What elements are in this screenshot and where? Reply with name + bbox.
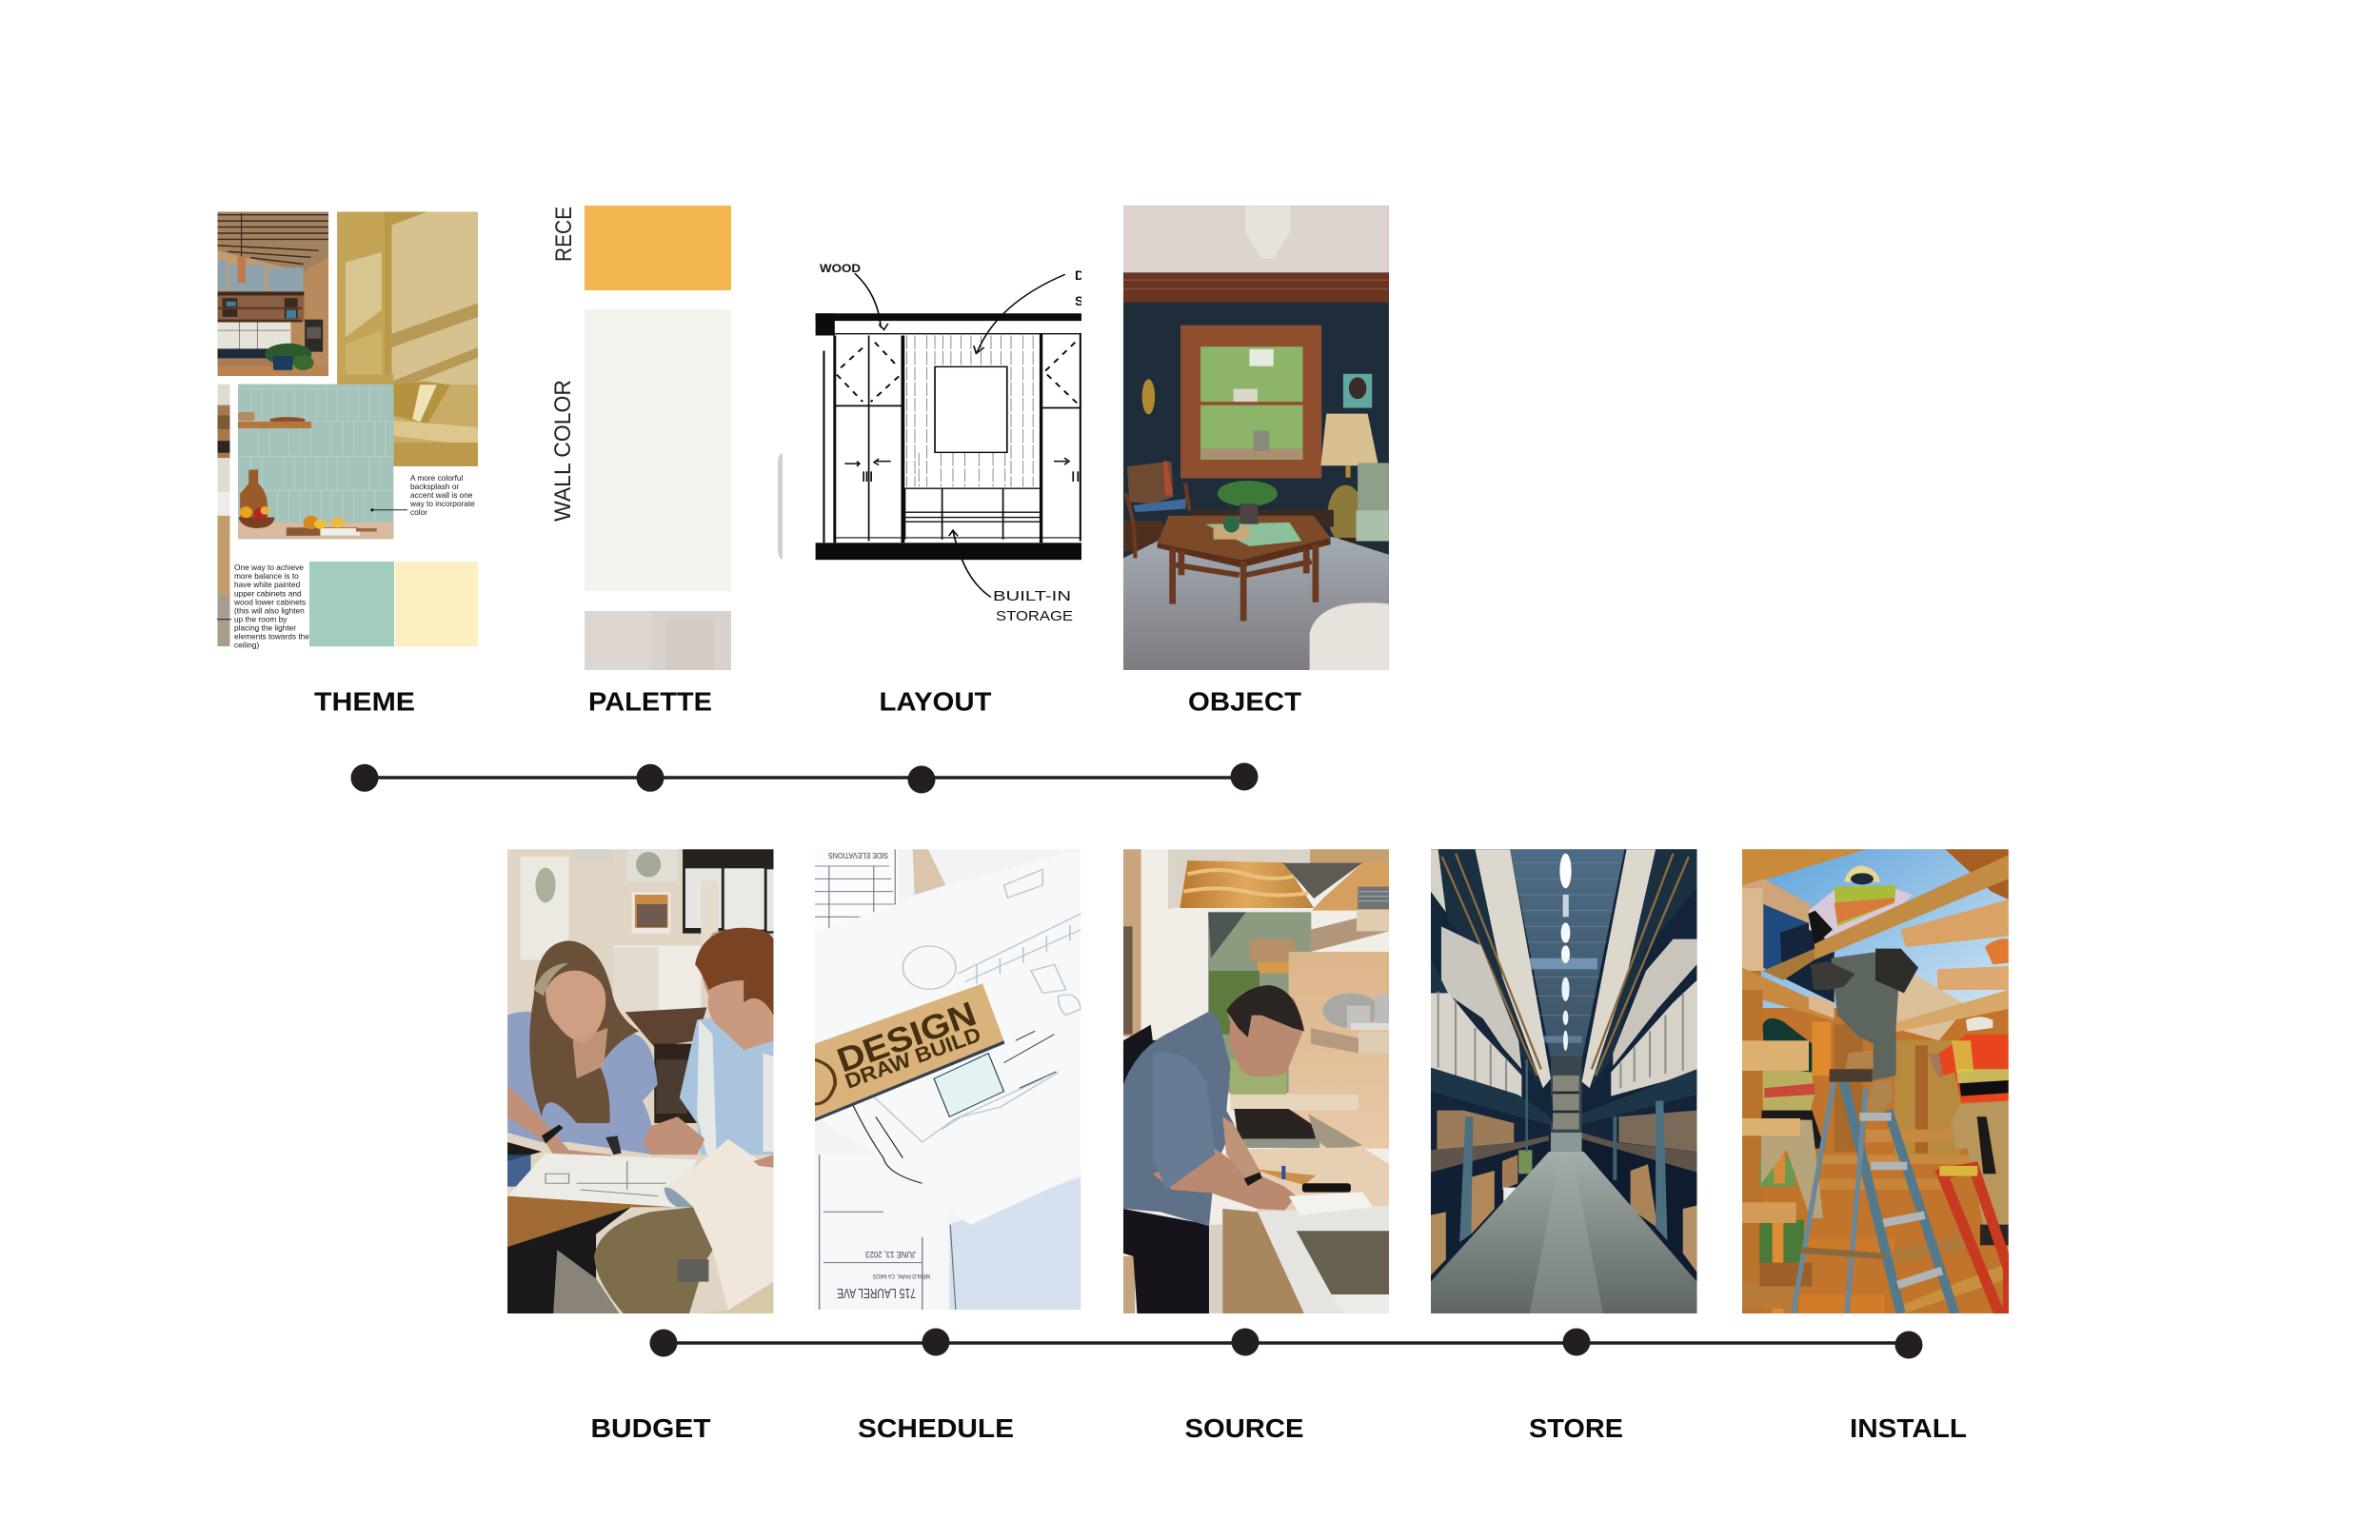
handwritten note: built-in storage <box>994 591 1072 621</box>
panel: layout sketch <box>816 262 1084 624</box>
callout: balance note: upper cabinets and <box>234 588 302 598</box>
label: object: OBJECT <box>1188 687 1301 716</box>
label: schedule: SCHEDULE <box>858 1413 1014 1443</box>
callout: balance note: up the room by <box>234 615 288 624</box>
label: layout: LAYOUT <box>880 687 992 716</box>
handwritten note: built-in storage: BUILT-IN <box>993 588 1071 604</box>
marker: install <box>1894 1331 1923 1359</box>
callout: balance note: One way to achieve <box>234 563 304 572</box>
right racks <box>1582 849 1696 1123</box>
blueprint text: MENLO PARK, CA 94025 <box>873 1273 930 1279</box>
callout: colorful backsplash note: accent wall is one <box>410 490 473 500</box>
marker: layout <box>908 765 935 794</box>
infographic canvas <box>217 206 2009 1437</box>
swatch: stone texture <box>585 611 731 670</box>
label: wall color: WALL COLOR <box>550 380 576 522</box>
photo: budget, two people reviewing plans <box>507 849 774 1313</box>
callout: balance note <box>233 563 309 650</box>
panel: object photo, living room <box>1123 206 1389 670</box>
marker: store <box>1563 1329 1590 1355</box>
scroll handle <box>778 453 783 560</box>
left worker <box>1763 1018 1812 1076</box>
label: palette: PALETTE <box>588 687 712 716</box>
callout: colorful backsplash note: way to incorporate <box>409 499 475 508</box>
photo: store, warehouse aisle <box>1431 849 1696 1313</box>
floor <box>1431 1152 1696 1313</box>
photo: sunlit yellow wall <box>337 211 478 466</box>
sign text: design draw build: DRAW BUILD <box>842 1022 984 1094</box>
red ladder <box>1942 1168 2009 1313</box>
right workers <box>1985 938 2009 964</box>
blueprint text <box>828 851 930 1301</box>
left racks <box>1431 849 1553 1123</box>
marker: object <box>1230 763 1259 790</box>
marker: palette <box>636 764 664 792</box>
photo: kitchen with slatted ceiling <box>217 211 328 376</box>
callout: colorful backsplash note: A more colorful <box>410 473 463 483</box>
callout: balance note: more balance is to <box>234 571 299 581</box>
timeline: top row <box>350 763 1259 794</box>
label: rece: RECE <box>551 207 577 262</box>
handwritten note: built-in storage: STORAGE <box>996 608 1073 624</box>
marker: source <box>1232 1329 1259 1355</box>
label: store: STORE <box>1529 1413 1623 1443</box>
marker: theme <box>350 764 379 792</box>
callout: balance note: (this will also lighten <box>234 605 305 615</box>
callout leader: backsplash <box>370 508 407 511</box>
label: install: INSTALL <box>1850 1413 1967 1443</box>
callout: balance note: wood lower cabinets <box>233 597 306 606</box>
callout: balance note: have white painted <box>234 580 301 589</box>
swatch: off-white <box>585 309 731 591</box>
callout: balance note: placing the lighter <box>234 623 296 633</box>
marker: schedule <box>922 1329 950 1355</box>
blueprint text: JUNE 13, 2023 <box>865 1249 916 1259</box>
sign text: design draw build: DESIGN <box>832 994 982 1080</box>
swatch: pale yellow <box>395 562 478 646</box>
photo: schedule, plans with design draw build sign <box>815 849 1081 1310</box>
panel: palette <box>550 206 731 670</box>
blueprint text: SIDE ELEVATIONS <box>828 851 888 860</box>
timeline: bottom row <box>649 1329 1923 1359</box>
swatch: teal <box>309 562 394 646</box>
marker: budget <box>649 1329 678 1357</box>
label: budget: BUDGET <box>590 1413 710 1443</box>
top worker <box>1809 889 1912 938</box>
callout: balance note: elements towards the <box>234 632 309 642</box>
handwritten note: cropped letters: S <box>1075 293 1083 308</box>
blueprint text: 715 LAUREL AVE <box>837 1285 916 1301</box>
swatch: orange <box>585 206 731 290</box>
handwritten note: cropped letters: D <box>1075 267 1084 283</box>
photo: cropped cabinet strip <box>217 385 230 646</box>
callout: colorful backsplash note <box>409 473 475 517</box>
photo: install, crew on wood framing <box>1742 849 2009 1313</box>
callout: balance note: ceiling) <box>234 641 260 650</box>
label: source: SOURCE <box>1184 1413 1304 1443</box>
callout: colorful backsplash note: color <box>410 507 427 517</box>
handwritten note: cropped letters <box>1076 270 1081 306</box>
photo: source, man taking notes in kitchen <box>1123 849 1389 1313</box>
blue ladder <box>1844 1082 1954 1313</box>
handwritten note: wood: WOOD <box>820 262 861 275</box>
callout leader: cabinets <box>217 619 231 621</box>
photo: teal tile backsplash <box>238 385 393 539</box>
panel: theme collage <box>217 211 478 650</box>
label: theme: THEME <box>314 687 415 716</box>
callout: colorful backsplash note: backsplash or <box>410 482 459 491</box>
